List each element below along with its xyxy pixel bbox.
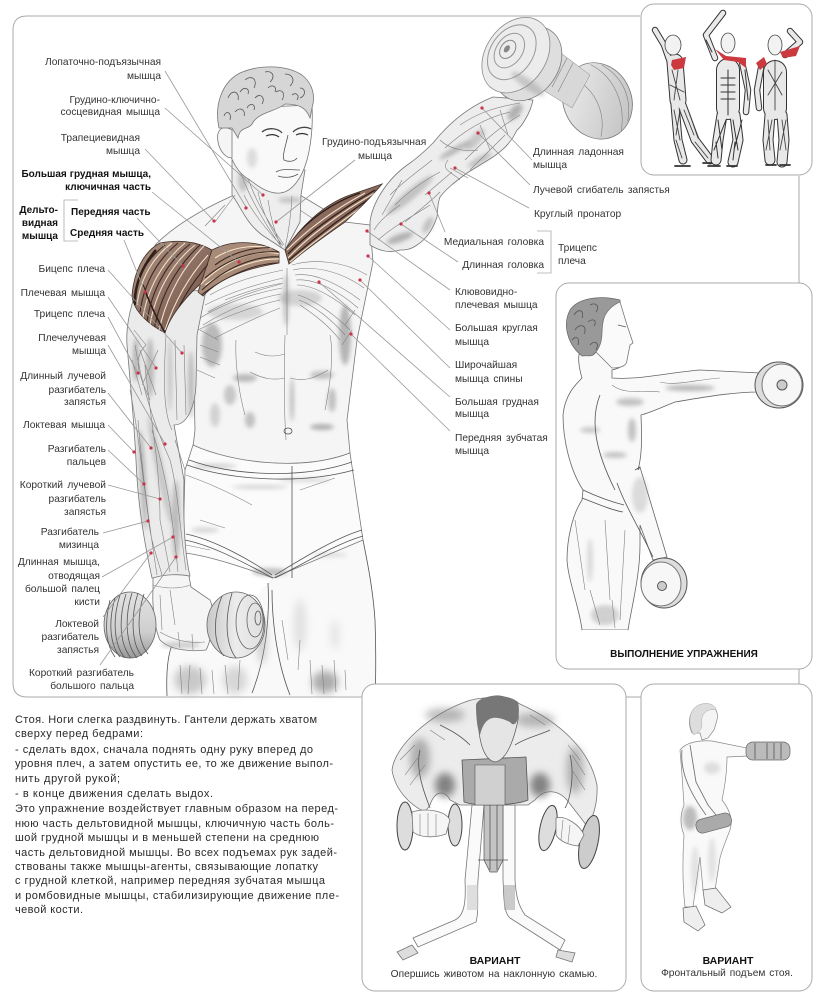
label: Грудино-подъязычная мышца: мышца xyxy=(358,151,392,162)
label: Широчайшая мышца спины: мышца спины xyxy=(455,374,523,385)
left bench dumbbell xyxy=(397,802,462,850)
label: Разгибатель пальцев: Разгибатель xyxy=(48,443,106,455)
label: Большая грудная мышца xyxy=(317,280,539,420)
label: Трицепс плеча: Трицепс плеча xyxy=(34,309,105,320)
label: Длинный лучевой разгибатель запястья xyxy=(20,371,153,450)
label: Дельтовидная мышца: видная xyxy=(22,218,58,229)
text block: exercise description: чевой кости. xyxy=(15,904,83,916)
label: Длинная мышца, отводящая большой палец кисти: кисти xyxy=(74,597,100,608)
chest muscle fibres xyxy=(197,262,367,440)
label: Длинный лучевой разгибатель запястья: разгибатель xyxy=(49,384,106,396)
panel: muscle chart figures xyxy=(641,4,812,175)
right hanging dumbbell xyxy=(207,592,265,658)
label: Лопаточно-подъязычная мышца: мышца xyxy=(127,71,161,82)
label: Грудино-подъязычная мышца: Грудино-подъязычная xyxy=(322,137,426,148)
label: Грудино-подъязычная мышца xyxy=(274,137,426,224)
head xyxy=(478,696,518,762)
navel xyxy=(284,428,292,434)
text block: exercise description: и ромбовидные мышцы, стабилизирующие движение пле- xyxy=(15,890,339,902)
lowered dumbbell xyxy=(641,558,687,608)
left hanging dumbbell xyxy=(104,592,156,658)
label: Большая круглая мышца: мышца xyxy=(455,337,489,348)
drawing: bench legs xyxy=(397,805,575,962)
label: Разгибатель мизинца: Разгибатель xyxy=(41,526,99,538)
hand and wrist xyxy=(153,575,213,651)
label: Длинный лучевой разгибатель запястья: запястья xyxy=(64,397,106,408)
label: Плечелучевая мышца xyxy=(38,333,167,446)
label: Разгибатель мизинца xyxy=(41,519,150,551)
label: Короткий лучевой разгибатель запястья: Короткий лучевой xyxy=(20,480,106,491)
label: Передняя зубчатая мышца xyxy=(349,332,548,457)
panel: exercise execution xyxy=(556,283,812,669)
text block: exercise description: часть дельтовидной мышцы. Во всех подъемах рук задей- xyxy=(15,847,337,859)
label: Передняя часть xyxy=(71,207,185,268)
label: Короткий разгибатель большого пальца: большого пальца xyxy=(50,680,134,692)
panel: main anatomy frame xyxy=(13,16,799,697)
label: Бицепс плеча xyxy=(39,264,184,355)
label: Передняя часть: Передняя часть xyxy=(71,207,151,218)
hair xyxy=(218,67,314,138)
label: Большая грудная мышца: Большая грудная xyxy=(455,397,539,408)
panel: variant on incline bench xyxy=(362,684,626,991)
text block: exercise description: Это упражнение воздействует главным образом на перед- xyxy=(15,803,338,815)
label: Круглый пронатор xyxy=(453,166,621,220)
head xyxy=(689,704,717,740)
text block: exercise description: - в конце движения сделать выдох. xyxy=(15,788,213,800)
label: Средняя часть xyxy=(70,228,147,294)
panel: variant standing front raise xyxy=(641,684,812,991)
label: Длинная головка: Длинная головка xyxy=(462,260,544,271)
lower dumbbell xyxy=(695,812,733,834)
label: Большая грудная мышца, ключичная часть: ключичная часть xyxy=(65,182,151,193)
label: Лопаточно-подъязычная мышца: Лопаточно-подъязычная xyxy=(45,57,161,68)
label: Грудино-ключично-сосцевидная мышца xyxy=(60,95,265,197)
label: Трапециевидная мышца: мышца xyxy=(106,146,140,157)
shorts xyxy=(183,445,363,578)
raised dumbbell xyxy=(468,4,645,151)
label: Круглый пронатор: Круглый пронатор xyxy=(534,209,621,220)
caption xyxy=(661,955,793,979)
text block: exercise description: нить другой рукой; xyxy=(15,773,120,785)
label: Клювовидно-плечевая мышца: плечевая мышца xyxy=(455,300,538,311)
caption: ВАРИАНТ xyxy=(470,955,521,967)
label: Плечелучевая мышца: Плечелучевая xyxy=(38,333,106,344)
label: Большая круглая мышца: Большая круглая xyxy=(455,323,538,334)
bench pad xyxy=(462,757,528,805)
caption: Фронтальный подъем стоя. xyxy=(661,968,793,979)
caption: ВЫПОЛНЕНИЕ УПРАЖНЕНИЯ xyxy=(610,649,758,660)
label: Дельтовидная мышца xyxy=(19,200,185,294)
text block: exercise description xyxy=(15,714,339,916)
label: Длинный лучевой разгибатель запястья: Длинный лучевой xyxy=(20,371,106,382)
label: Передняя зубчатая мышца: Передняя зубчатая xyxy=(455,432,548,444)
label: Длинная мышца, отводящая большой палец кисти: отводящая xyxy=(48,571,100,582)
label: Клювовидно-плечевая мышца xyxy=(365,229,538,311)
label: Плечелучевая мышца: мышца xyxy=(72,346,106,357)
thighs xyxy=(167,540,376,696)
caption: ВАРИАНТ xyxy=(703,955,754,967)
label: Короткий разгибатель большого пальца xyxy=(29,555,178,692)
label: Большая грудная мышца: мышца xyxy=(455,409,489,420)
label: Локтевая мышца xyxy=(23,420,136,454)
label: Плечевая мышца: Плечевая мышца xyxy=(21,288,105,299)
label: Длинная мышца, отводящая большой палец кисти xyxy=(18,535,175,608)
text block: exercise description: сверху перед бедрами: xyxy=(15,728,143,740)
label: Локтевой разгибатель запястья: запястья xyxy=(57,645,99,656)
label: Передняя зубчатая мышца: мышца xyxy=(455,446,489,457)
facial features xyxy=(262,127,311,133)
label: Медиальная головка: Медиальная головка xyxy=(444,237,544,248)
label: Длинная мышца, отводящая большой палец кисти: большой палец xyxy=(25,583,100,595)
label: Разгибатель пальцев xyxy=(48,443,146,486)
text block: exercise description: с грудной клеткой, например передняя зубчатая мышца xyxy=(15,875,326,887)
label: Длинная ладонная мышца: Длинная ладонная xyxy=(533,147,624,158)
label: Длинная ладонная мышца xyxy=(480,106,624,171)
icon: figure back view xyxy=(757,31,800,165)
icon: figure side view xyxy=(655,30,712,166)
label: Локтевой разгибатель запястья: Локтевой xyxy=(55,619,99,630)
text block: exercise description: шой грудной мышцы и в меньшей степени на среднюю xyxy=(15,832,319,844)
label: Грудино-ключично-сосцевидная мышца: сосцевидная мышца xyxy=(60,107,160,118)
label: Большая грудная мышца, ключичная часть xyxy=(21,169,241,264)
label: Лопаточно-подъязычная мышца xyxy=(45,57,248,210)
label: Трицепс плеча xyxy=(34,309,140,375)
label: Плечевая мышца xyxy=(21,288,158,370)
label: Большая грудная мышца, ключичная часть: Большая грудная мышца, xyxy=(21,169,151,180)
head and neck xyxy=(205,67,318,250)
label: Короткий лучевой разгибатель запястья: запястья xyxy=(64,507,106,518)
label: Широчайшая мышца спины xyxy=(358,278,523,385)
label: Бицепс плеча: Бицепс плеча xyxy=(39,264,105,275)
caption: Опершись животом на наклонную скамью. xyxy=(391,969,597,980)
label: Короткий лучевой разгибатель запястья: разгибатель xyxy=(49,493,106,505)
label: Локтевая мышца: Локтевая мышца xyxy=(23,420,105,431)
hanging arm xyxy=(127,290,206,578)
sneakers xyxy=(683,906,705,931)
label: Трицепс плеча, головки: плеча xyxy=(558,256,586,267)
label: Длинная мышца, отводящая большой палец кисти: Длинная мышца, xyxy=(18,557,100,568)
label: Короткий лучевой разгибатель запястья xyxy=(20,480,162,518)
raised dumbbell xyxy=(755,362,803,408)
label: Лучевой сгибатель запястья xyxy=(476,131,670,196)
drawing: man on bench xyxy=(392,696,597,826)
text block: exercise description: уровня плеч, а затем опустить ее, то же движение выпол- xyxy=(15,758,333,770)
label: Грудино-ключично-сосцевидная мышца: Грудино-ключично- xyxy=(70,95,160,106)
label: Локтевой разгибатель запястья: разгибатель xyxy=(42,631,99,643)
label: Разгибатель пальцев: пальцев xyxy=(67,457,106,468)
label: Средняя часть: Средняя часть xyxy=(70,228,144,239)
label: Широчайшая мышца спины: Широчайшая xyxy=(455,360,517,371)
label: Длинная головка xyxy=(399,222,544,271)
label: Разгибатель мизинца: мизинца xyxy=(59,540,99,551)
text block: exercise description: нюю часть дельтовидной мышцы, ключичную часть боль- xyxy=(15,818,334,830)
label: Дельтовидная мышца: Дельто- xyxy=(19,205,58,216)
label: Медиальная головка xyxy=(427,191,544,248)
label: Трицепс плеча, головки: Трицепс xyxy=(558,243,597,254)
label: Длинная ладонная мышца: мышца xyxy=(533,160,567,171)
ear xyxy=(218,128,232,158)
label: Дельтовидная мышца: мышца xyxy=(22,231,58,242)
drawing: side view man xyxy=(563,298,803,631)
text block: exercise description: ствованы также мышцы-агенты, связывающие лопатку xyxy=(15,861,318,873)
label: Клювовидно-плечевая мышца: Клювовидно- xyxy=(455,287,517,298)
right bench dumbbell xyxy=(535,804,603,870)
drawing: woman with dumbbells xyxy=(680,703,790,931)
deltoid and clavicular pectoral highlighted muscles xyxy=(132,184,382,335)
raised arm xyxy=(370,97,533,252)
label: Локтевой разгибатель запястья xyxy=(42,551,153,656)
raised dumbbell xyxy=(746,742,790,760)
text block: exercise description: Стоя. Ноги слегка раздвинуть. Гантели держать хватом xyxy=(15,714,317,726)
torso xyxy=(155,195,373,463)
label: Лучевой сгибатель запястья: Лучевой сгибатель запястья xyxy=(533,184,670,196)
label: Трапециевидная мышца: Трапециевидная xyxy=(61,133,140,144)
hair xyxy=(566,298,620,356)
label: Трицепс плеча, головки xyxy=(399,191,597,273)
label: Трапециевидная мышца xyxy=(61,133,216,223)
label: Большая круглая мышца xyxy=(366,254,538,348)
icon: figure front view xyxy=(706,13,748,166)
caption xyxy=(391,955,597,980)
main anatomical figure xyxy=(104,4,645,696)
label: Короткий разгибатель большого пальца: Короткий разгибатель xyxy=(29,667,134,679)
text block: exercise description: - сделать вдох, сначала поднять одну руку вперед до xyxy=(15,744,313,756)
